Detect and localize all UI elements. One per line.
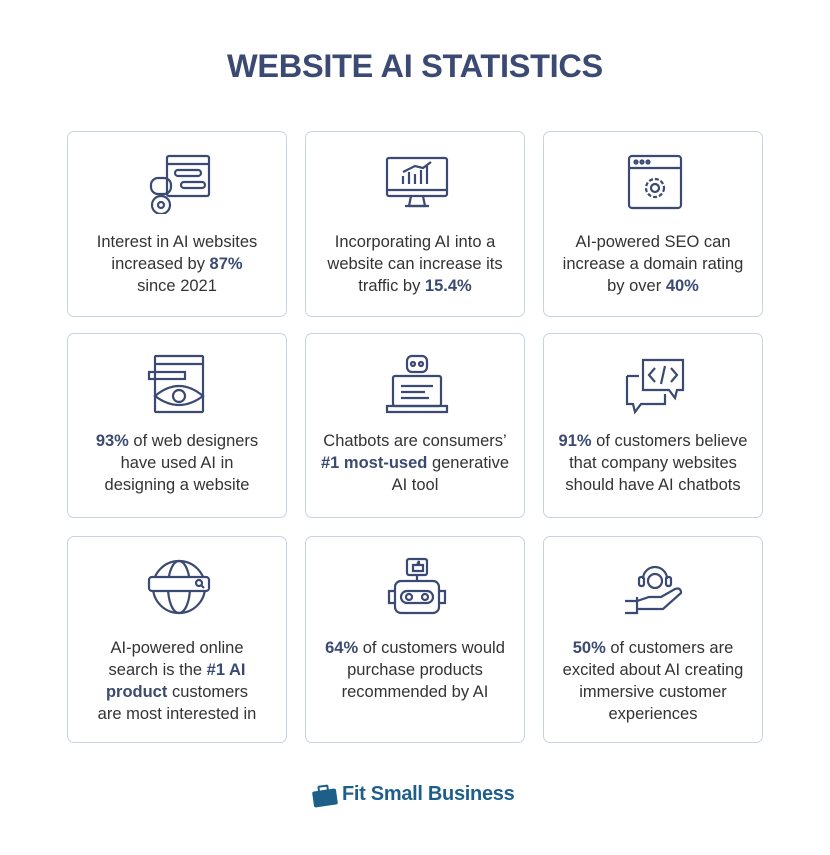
text: immersive customer [579,683,727,701]
panel: immersive experiences [543,536,763,743]
text: experiences [608,705,697,723]
text: should have AI chatbots [565,476,741,494]
panel: customers believe [543,333,763,518]
text [327,233,503,295]
text: AI-powered SEO can [576,233,730,251]
text: 91% of customers believe [559,432,747,450]
text [98,639,256,723]
text: website can increase its [327,255,503,273]
text: have used AI in [121,454,233,472]
icon: laptop robot [386,354,448,414]
text: search is the #1 AI [109,661,245,679]
text [325,639,505,701]
text: excited about AI creating [563,661,743,679]
panel: online search [67,536,287,743]
text: Chatbots are consumers’ [323,432,507,450]
text: purchase products [347,661,483,679]
panel: web designers [67,333,287,518]
panel: purchase products [305,536,525,743]
text: AI tool [392,476,438,494]
text [559,432,747,494]
icon: code chat [626,358,684,414]
text: increased by 87% [111,255,243,273]
text [97,233,257,295]
logo: Fit Small Business: Fit Small Business [342,783,514,805]
text: product customers [106,683,248,701]
text: traffic by 15.4% [358,277,472,295]
icon: globe search [148,560,210,614]
icon: eye pencil [148,354,205,414]
panel: chatbots [305,333,525,518]
panel: traffic [305,131,525,317]
title: WEBSITE AI STATISTICS [227,48,603,84]
icon: robot chat [150,154,210,214]
text: designing a website [105,476,249,494]
text: #1 most-used generative [321,454,509,472]
text: increase a domain rating [563,255,743,273]
icon: browser gear [628,154,682,210]
text: that company websites [569,454,737,472]
text: 64% of customers would [325,639,505,657]
panel: SEO [543,131,763,317]
text: by over 40% [607,277,699,295]
icon: robot thumbs up [388,558,446,614]
text: are most interested in [98,705,256,723]
icon: monitor chart [386,156,448,208]
text: since 2021 [137,277,217,295]
icon: hand headset [625,566,682,614]
text: 50% of customers are [573,639,733,657]
text [321,432,509,494]
text: 93% of web designers [96,432,258,450]
text: Interest in AI websites [97,233,257,251]
text [563,233,743,295]
text: recommended by AI [342,683,488,701]
text: AI-powered online [110,639,244,657]
text [563,639,743,723]
text: Incorporating AI into a [335,233,495,251]
text [96,432,258,494]
panel: interest in AI websites [67,131,287,317]
